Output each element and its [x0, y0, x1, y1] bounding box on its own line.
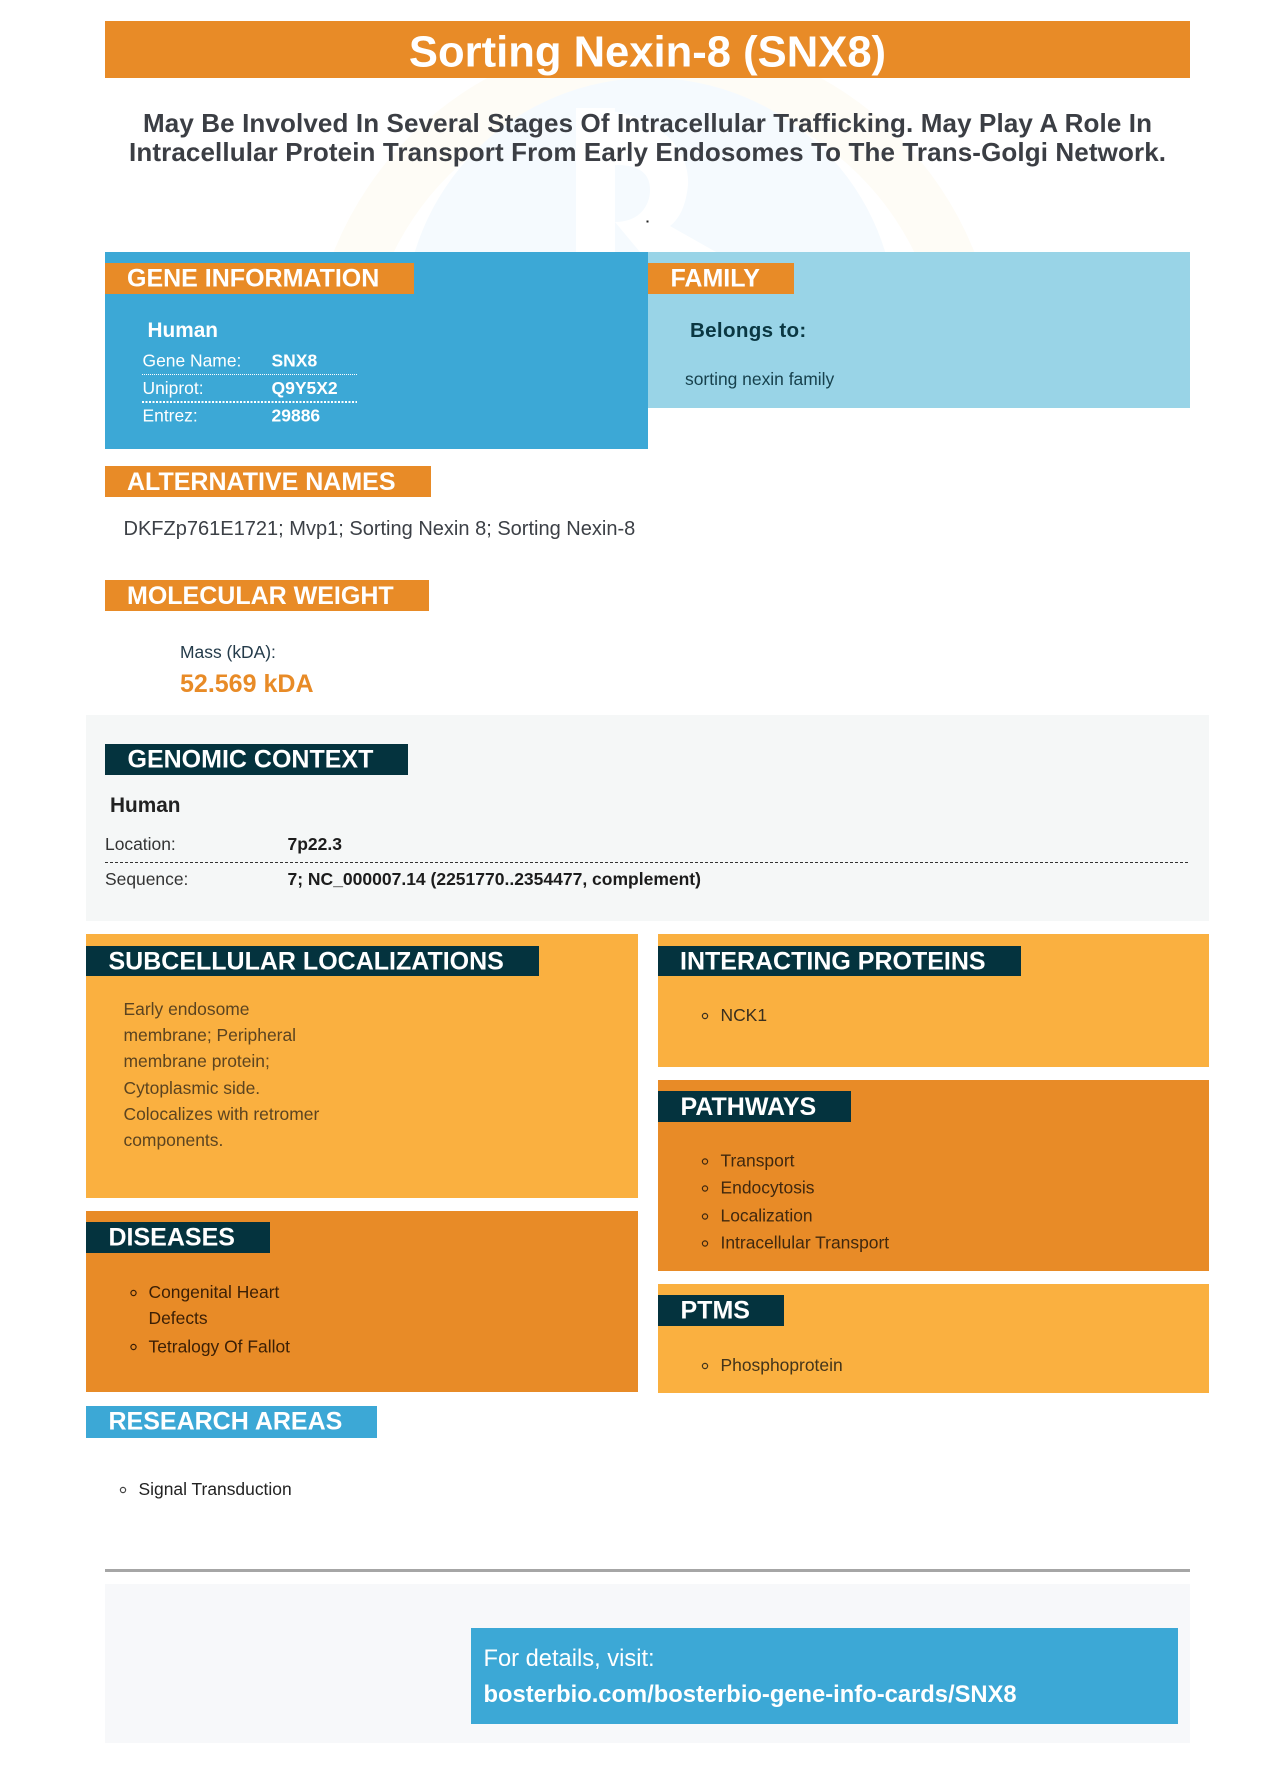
molecular weight value: 52.569 kDA [180, 670, 314, 698]
heading: pathways: PATHWAYS [680, 1093, 816, 1121]
gene identifiers table: Gene Name: [142, 350, 241, 370]
heading: ptms [658, 1295, 784, 1326]
callout: details link [471, 1628, 1178, 1724]
sequence row: Sequence: [105, 869, 188, 889]
pathways list: Localization [720, 1206, 813, 1226]
panel: ptms [658, 1284, 1209, 1393]
watermark logo [334, 78, 974, 252]
heading: family: FAMILY [670, 264, 760, 292]
panel: gene information [105, 252, 648, 449]
diseases list: Tetralogy Of Fallot [148, 1336, 290, 1356]
diseases list: Defects [148, 1308, 208, 1328]
location row [105, 834, 342, 854]
localization text: components. [124, 1130, 223, 1150]
species label: Human [110, 794, 180, 817]
gene identifiers table: Entrez: [142, 406, 198, 426]
localization text: Cytoplasmic side. [124, 1078, 260, 1098]
heading: gene information: GENE INFORMATION [127, 264, 379, 292]
sequence row [105, 869, 701, 889]
family value: sorting nexin family [685, 369, 835, 389]
heading: pathways [658, 1091, 851, 1122]
panel: pathways [658, 1080, 1209, 1271]
ptms list: Phosphoprotein [720, 1355, 843, 1375]
location row: 7p22.3 [288, 834, 342, 854]
panel: interacting proteins [658, 934, 1209, 1067]
family label: Belongs to: [690, 319, 807, 342]
interacting proteins list: NCK1 [720, 1005, 767, 1025]
heading: family [648, 263, 794, 294]
gene identifiers table: 29886 [272, 406, 320, 426]
alternative names text: DKFZp761E1721; Mvp1; Sorting Nexin 8; Sorting Nexin-8 [124, 518, 635, 540]
callout: details link: bosterbio.com/bosterbio-gene-info-cards/SNX8 [484, 1681, 1017, 1708]
title banner: Sorting Nexin-8 (SNX8) [409, 28, 886, 76]
molecular weight value: Mass (kDA): [180, 642, 276, 662]
gene identifiers table: Uniprot: [142, 378, 204, 398]
panel: family [648, 252, 1190, 408]
pathways list: Endocytosis [720, 1178, 815, 1198]
diseases list [131, 1282, 290, 1356]
gene identifiers table [142, 350, 357, 426]
heading: alternative names: ALTERNATIVE NAMES [127, 468, 396, 496]
title banner [105, 21, 1190, 78]
molecular weight value [180, 642, 314, 698]
panel: footer [105, 1584, 1190, 1743]
localization text: membrane; Peripheral [124, 1025, 296, 1045]
research areas list: Signal Transduction [138, 1479, 292, 1499]
subtitle description: Intracellular Protein Transport From Early Endosomes To The Trans-Golgi Network. [129, 137, 1166, 167]
callout: details link: For details, visit: [484, 1646, 655, 1672]
heading: ptms: PTMS [680, 1296, 750, 1324]
subtitle description: May Be Involved In Several Stages Of Intracellular Trafficking. May Play A Role In [143, 108, 1152, 138]
pathways list: Transport [720, 1150, 795, 1170]
heading: subcellular localizations: SUBCELLULAR LOCALIZATIONS [108, 948, 504, 976]
localization text: Colocalizes with retromer [124, 1104, 319, 1124]
heading: interacting proteins: INTERACTING PROTEINS [680, 948, 986, 976]
heading: genomic context: GENOMIC CONTEXT [128, 746, 373, 774]
pathways list [702, 1150, 889, 1252]
localization text: Early endosome [124, 999, 250, 1019]
localization text [124, 999, 319, 1150]
gene identifiers table: SNX8 [272, 350, 317, 370]
diseases list: Congenital Heart [148, 1282, 280, 1302]
pathways list: Intracellular Transport [720, 1232, 889, 1252]
species label: Human [148, 319, 218, 342]
heading: diseases: DISEASES [108, 1224, 235, 1252]
panel: subcellular localizations [86, 934, 638, 1198]
subtitle description [129, 108, 1166, 167]
panel: genomic context [86, 715, 1209, 921]
small dot [646, 220, 648, 222]
heading: research areas: RESEARCH AREAS [108, 1408, 342, 1436]
sequence row: 7; NC_000007.14 (2251770..2354477, complement) [288, 869, 701, 889]
localization text: membrane protein; [124, 1051, 270, 1071]
heading: molecular weight: MOLECULAR WEIGHT [127, 582, 394, 610]
gene identifiers table: Q9Y5X2 [272, 378, 338, 398]
location row: Location: [105, 834, 176, 854]
panel: diseases [86, 1211, 638, 1392]
heading: diseases [86, 1222, 270, 1253]
